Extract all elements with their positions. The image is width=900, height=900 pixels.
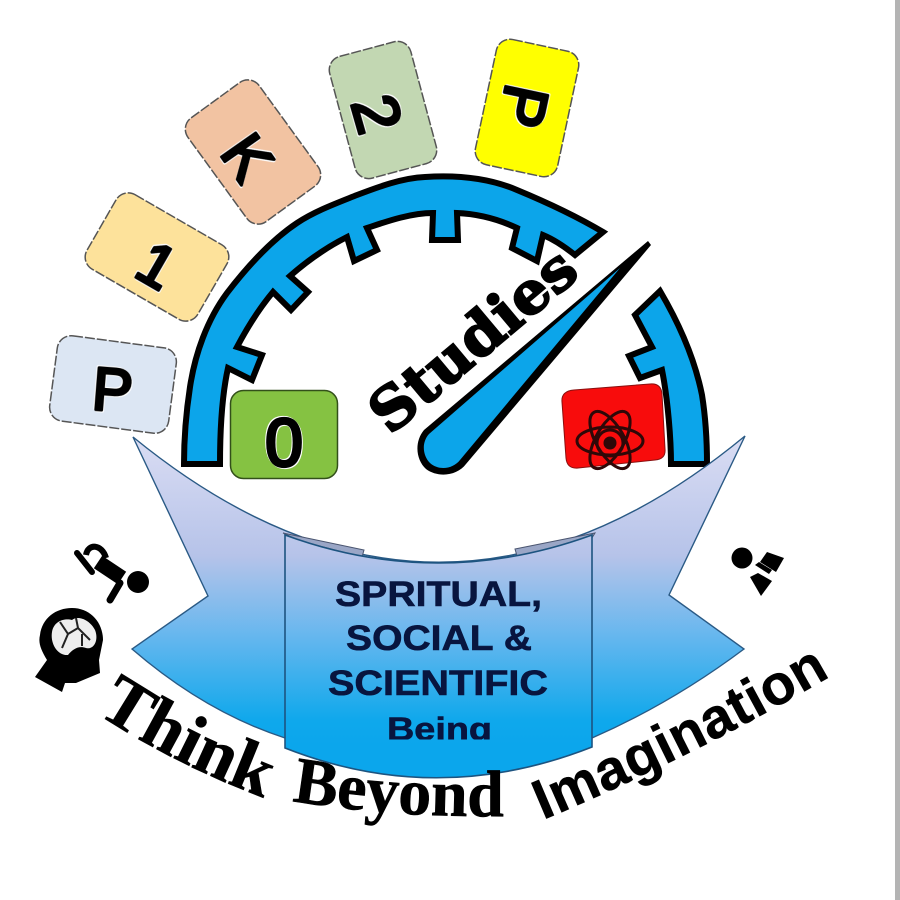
ribbon banner	[132, 436, 745, 738]
slogan: Imagination	[543, 672, 838, 820]
panel text: SOCIAL &	[346, 619, 532, 658]
card: K	[180, 74, 326, 230]
logo illustration: Beyond	[292, 758, 504, 826]
card: 2: 2	[337, 87, 416, 141]
card: 1: 1	[126, 228, 188, 303]
panel text: Being	[387, 711, 492, 747]
card: 0	[230, 390, 338, 481]
card: P	[48, 334, 178, 435]
slogan: Beyond	[292, 801, 510, 816]
card: P yellow: P	[485, 79, 561, 133]
gauge arc: right segment	[629, 291, 707, 464]
card: 2	[325, 38, 440, 182]
icon: head with brain	[35, 608, 103, 692]
heading: Studies: Studies	[355, 234, 591, 447]
card: P yellow	[473, 37, 581, 179]
card: K: K	[208, 122, 286, 193]
icon: atom	[577, 405, 643, 475]
ribbon fold tabs	[283, 533, 595, 557]
gauge needle	[417, 241, 651, 475]
card: red science	[562, 384, 665, 475]
logo illustration: Think	[104, 673, 274, 798]
gauge arc: main toothed segment	[184, 176, 603, 464]
panel text: SCIENTIFIC	[328, 664, 548, 703]
card: 0: 0	[265, 405, 303, 481]
card: 1	[80, 188, 234, 326]
icon: person reading	[732, 548, 784, 596]
logo illustration: Imagination	[531, 654, 828, 819]
panel text	[328, 575, 548, 747]
ribbon centre panel	[285, 535, 592, 778]
icon: person doing pose	[77, 547, 149, 600]
card: P: P	[90, 355, 135, 425]
panel text: SPRITUAL,	[335, 575, 542, 614]
slogan: Think	[96, 713, 272, 801]
